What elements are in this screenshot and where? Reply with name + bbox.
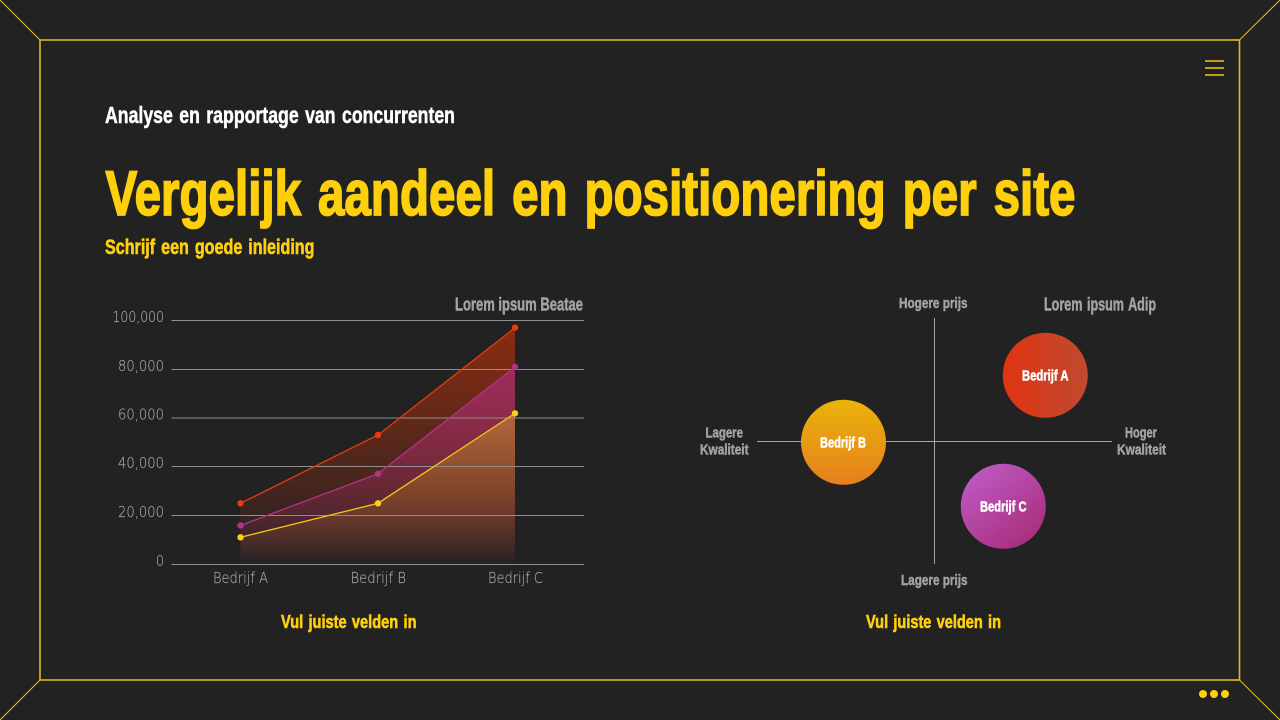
y axis labels: 100,000: [112, 308, 164, 326]
x axis labels: Bedrijf C: [488, 569, 543, 587]
eyebrow heading: Analyse en rapportage van concurrenten: [105, 102, 455, 128]
y axis labels: [112, 308, 164, 570]
axis label: higher quality: [1117, 426, 1166, 458]
series: yellow line: [237, 410, 518, 540]
series: pink line: [237, 364, 518, 529]
bubble: Bedrijf B: [801, 400, 886, 485]
grid lines: [172, 320, 584, 564]
icon: hamburger menu: [1205, 61, 1224, 75]
x axis labels: [213, 569, 543, 587]
bubble: Bedrijf A: [1003, 333, 1088, 418]
y axis labels: 80,000: [118, 357, 164, 375]
series: red line: [237, 324, 518, 506]
matrix caption: Vul juiste velden in: [866, 612, 1001, 632]
bubble: Bedrijf B: Bedrijf B: [820, 436, 866, 452]
y axis labels: 60,000: [118, 406, 164, 424]
matrix axes: [757, 318, 1112, 564]
chart heading: Lorem ipsum Beatae: [455, 294, 583, 314]
y axis labels: 0: [156, 552, 164, 570]
y axis labels: 40,000: [118, 454, 164, 472]
panel: area chart: [112, 294, 584, 632]
area fills: [240, 328, 515, 564]
bubble: Bedrijf C: Bedrijf C: [980, 500, 1027, 516]
axis label: lower quality: Kwaliteit: [700, 442, 749, 458]
y axis labels: 20,000: [118, 503, 164, 521]
panel: positioning matrix: [700, 294, 1166, 632]
subtitle: Schrijf een goede inleiding: [105, 235, 314, 259]
chart caption: Vul juiste velden in: [281, 612, 416, 632]
x axis labels: Bedrijf A: [213, 569, 268, 587]
icon: three dots: [1199, 690, 1229, 698]
matrix heading: Lorem ipsum Adip: [1044, 294, 1156, 314]
axis label: higher quality: Hoger: [1125, 426, 1157, 442]
axis label: lower quality: Lagere: [706, 426, 743, 442]
axis label: higher quality: Kwaliteit: [1117, 442, 1166, 458]
axis label: lower quality: [700, 426, 749, 458]
x axis labels: Bedrijf B: [350, 569, 406, 587]
axis label: lower price: Lagere prijs: [901, 573, 968, 589]
bubble: Bedrijf A: Bedrijf A: [1022, 369, 1069, 385]
axis label: higher price: Hogere prijs: [899, 296, 968, 312]
bubble: Bedrijf C: [961, 464, 1046, 549]
